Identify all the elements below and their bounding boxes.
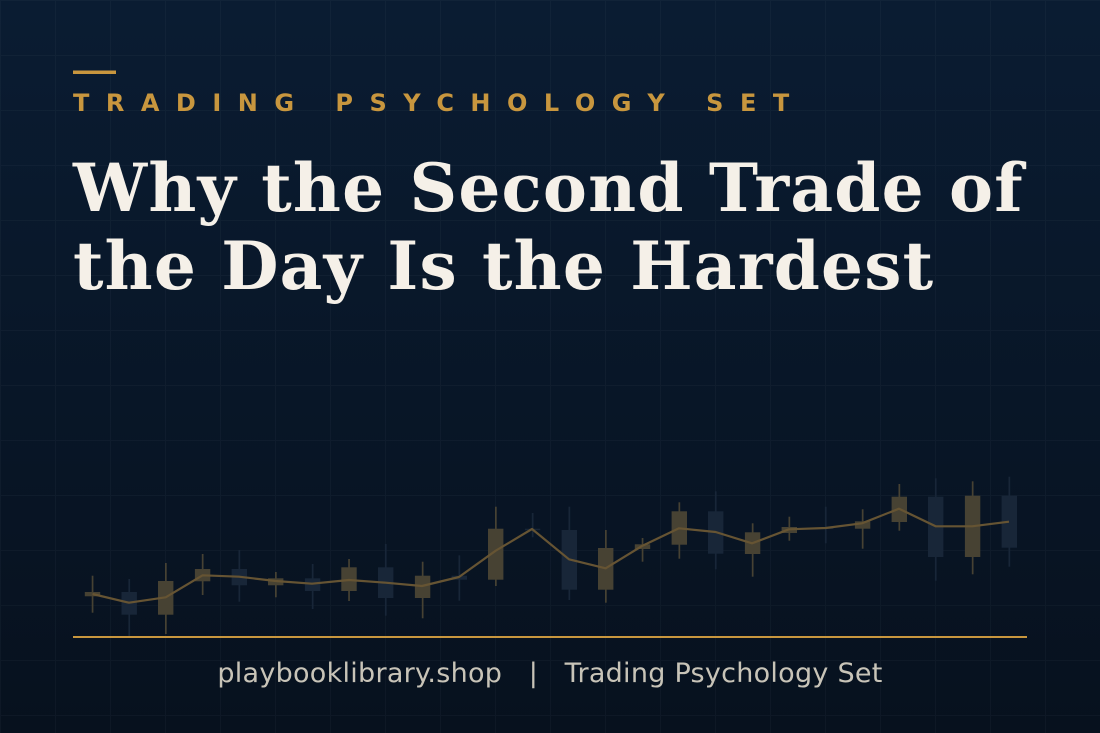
footer text: playbooklibrary.shop | Trading Psychology Set (217, 658, 883, 689)
price line (92, 509, 1009, 603)
candlestick chart (85, 477, 1017, 636)
title: Why the Second Trade of (72, 149, 1026, 227)
title: the Day Is the Hardest (73, 227, 934, 305)
gold candles (85, 481, 980, 634)
eyebrow label: TRADING PSYCHOLOGY SET (73, 89, 806, 117)
title (72, 149, 1026, 305)
blue candles (122, 477, 1017, 636)
footer rule (73, 636, 1027, 638)
accent bar (73, 70, 116, 74)
